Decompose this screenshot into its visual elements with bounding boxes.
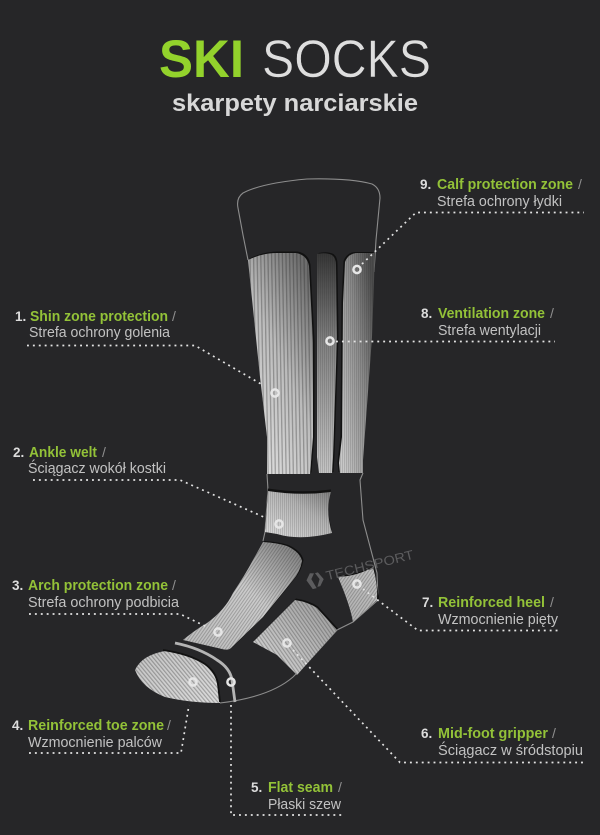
- calf protection panel: [338, 252, 375, 473]
- callout 8: ventilation zone: /: [550, 305, 554, 321]
- callout 6: mid-foot gripper: /: [552, 725, 556, 741]
- logo wordmark: TECHSPORT: [324, 547, 415, 583]
- shin zone panel: [248, 252, 314, 474]
- callout 7: reinforced heel: Reinforced heel: [438, 595, 545, 611]
- title: SOCKS: [262, 30, 431, 89]
- callout 9: calf protection: Calf protection zone: [437, 177, 573, 193]
- callout 4: toe zone: 4.: [12, 718, 23, 733]
- callout 4: toe zone: Wzmocnienie palców: [28, 735, 163, 751]
- icon: Techsport logo: [305, 570, 325, 590]
- callout 6: mid-foot gripper: 6.: [421, 726, 432, 741]
- callout 4: toe zone: [12, 678, 197, 753]
- callout 9: calf protection: 9.: [420, 177, 431, 192]
- subtitle: skarpety narciarskie: [172, 90, 418, 117]
- callout 2: ankle welt: /: [102, 444, 106, 460]
- callout 5: flat seam: Flat seam: [268, 780, 333, 796]
- callout 8: ventilation zone: 8.: [421, 306, 432, 321]
- callout 3: arch protection: [12, 577, 222, 636]
- callout 9: calf protection: [353, 176, 584, 273]
- reinforced toe panel: [135, 650, 220, 703]
- callout 3: arch protection: Strefa ochrony podbicia: [28, 595, 180, 611]
- ankle welt panel: [265, 488, 332, 537]
- callout 5: flat seam: [227, 678, 344, 815]
- callout 8: ventilation zone: Strefa wentylacji: [438, 323, 541, 339]
- sock illustration: [135, 179, 380, 703]
- callout 3: arch protection: Arch protection zone: [28, 578, 168, 594]
- callout 3: arch protection: /: [172, 577, 176, 593]
- callout 6: mid-foot gripper: Ściągacz w śródstopiu: [438, 741, 583, 759]
- callout 7: reinforced heel: 7.: [422, 595, 433, 610]
- sock outline: [220, 179, 380, 703]
- callout 8: ventilation zone: Ventilation zone: [438, 306, 545, 322]
- callout 7: reinforced heel: /: [550, 594, 554, 610]
- flat seam band: [175, 643, 235, 702]
- callout 6: mid-foot gripper: Mid-foot gripper: [438, 726, 548, 742]
- callout 6: mid-foot gripper: [283, 639, 583, 762]
- watermark: Techsport: [305, 547, 416, 590]
- callout 7: reinforced heel: Wzmocnienie pięty: [438, 612, 559, 628]
- callout 5: flat seam: 5.: [251, 780, 262, 795]
- callout 1: shin zone: /: [172, 308, 176, 324]
- callout 4: toe zone: Reinforced toe zone: [28, 718, 164, 734]
- callout 2: ankle welt: Ankle welt: [29, 445, 97, 461]
- callout 8: ventilation zone: [326, 305, 555, 345]
- callout 9: calf protection: /: [578, 176, 582, 192]
- ventilation zone panel: [317, 252, 338, 473]
- callout 2: ankle welt: Ściągacz wokół kostki: [28, 459, 166, 477]
- mid-foot gripper panel: [253, 598, 338, 675]
- callout 9: calf protection: Strefa ochrony łydki: [437, 194, 562, 210]
- callout 2: ankle welt: 2.: [13, 445, 24, 460]
- callout 3: arch protection: 3.: [12, 578, 23, 593]
- title: [159, 30, 431, 89]
- arch protection panel: [183, 541, 304, 650]
- callout 1: shin zone: 1.: [15, 309, 26, 324]
- callout 7: reinforced heel: [353, 580, 559, 630]
- callout 1: shin zone: Shin zone protection: [30, 309, 168, 325]
- callout 5: flat seam: /: [338, 779, 342, 795]
- callout 5: flat seam: Płaski szew: [268, 797, 342, 813]
- callout 1: shin zone: [15, 308, 279, 397]
- reinforced heel panel: [338, 566, 379, 622]
- callout 1: shin zone: Strefa ochrony golenia: [29, 325, 171, 341]
- title: SKI: [159, 30, 244, 89]
- callout 4: toe zone: /: [167, 717, 171, 733]
- callout 2: ankle welt: [13, 444, 283, 528]
